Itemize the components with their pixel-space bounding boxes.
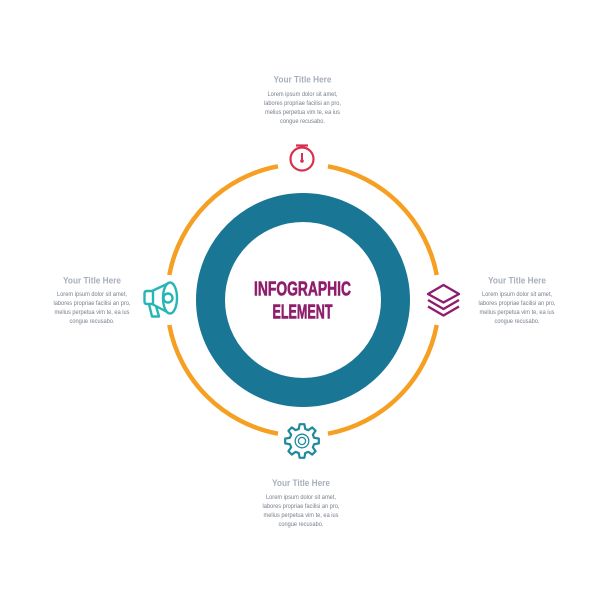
text block: top: labores propriae facilisi an pro,	[264, 100, 341, 107]
text block: left: congue recusabo.	[70, 318, 115, 325]
center heading: ELEMENT	[272, 302, 332, 324]
orange segmented outer ring	[169, 166, 437, 434]
text block: left	[54, 276, 131, 325]
text block: bottom: Your Title Here	[272, 478, 330, 489]
text block: left: Your Title Here	[63, 276, 121, 286]
text block: right: melius perpetua vim te, ea ius	[480, 309, 555, 316]
icon: stacked layers	[428, 285, 459, 316]
teal central ring	[210, 208, 396, 392]
center heading	[254, 278, 351, 324]
text block: right	[478, 276, 556, 325]
text block: right: labores propriae facilisi an pro,	[478, 300, 556, 307]
center heading: INFOGRAPHIC	[254, 278, 351, 300]
icon: stopwatch	[290, 146, 314, 170]
text block: right: Your Title Here	[488, 276, 546, 286]
text block: bottom	[262, 478, 340, 528]
text block: top: Your Title Here	[274, 74, 332, 86]
text block: top: Lorem ipsum dolor sit amet,	[268, 91, 338, 98]
text block: right: congue recusabo.	[494, 318, 540, 325]
text block: left: melius perpetua vim te, ea ius	[54, 309, 130, 316]
text block: top: melius perpetua vim te, ea ius	[265, 109, 341, 116]
text block: top: congue recusabo.	[280, 118, 325, 125]
text block: bottom: melius perpetua vim te, ea ius	[264, 512, 339, 519]
text block: left: Lorem ipsum dolor sit amet,	[57, 291, 127, 298]
text block: left: labores propriae facilisi an pro,	[54, 300, 131, 307]
text block: right: Lorem ipsum dolor sit amet,	[482, 291, 552, 298]
icon: megaphone	[144, 282, 177, 316]
icon: gear	[285, 424, 319, 458]
text block: top	[264, 74, 341, 125]
text block: bottom: congue recusabo.	[278, 521, 324, 528]
text block: bottom: Lorem ipsum dolor sit amet,	[266, 494, 336, 501]
text block: bottom: labores propriae facilisi an pro,	[262, 503, 340, 510]
